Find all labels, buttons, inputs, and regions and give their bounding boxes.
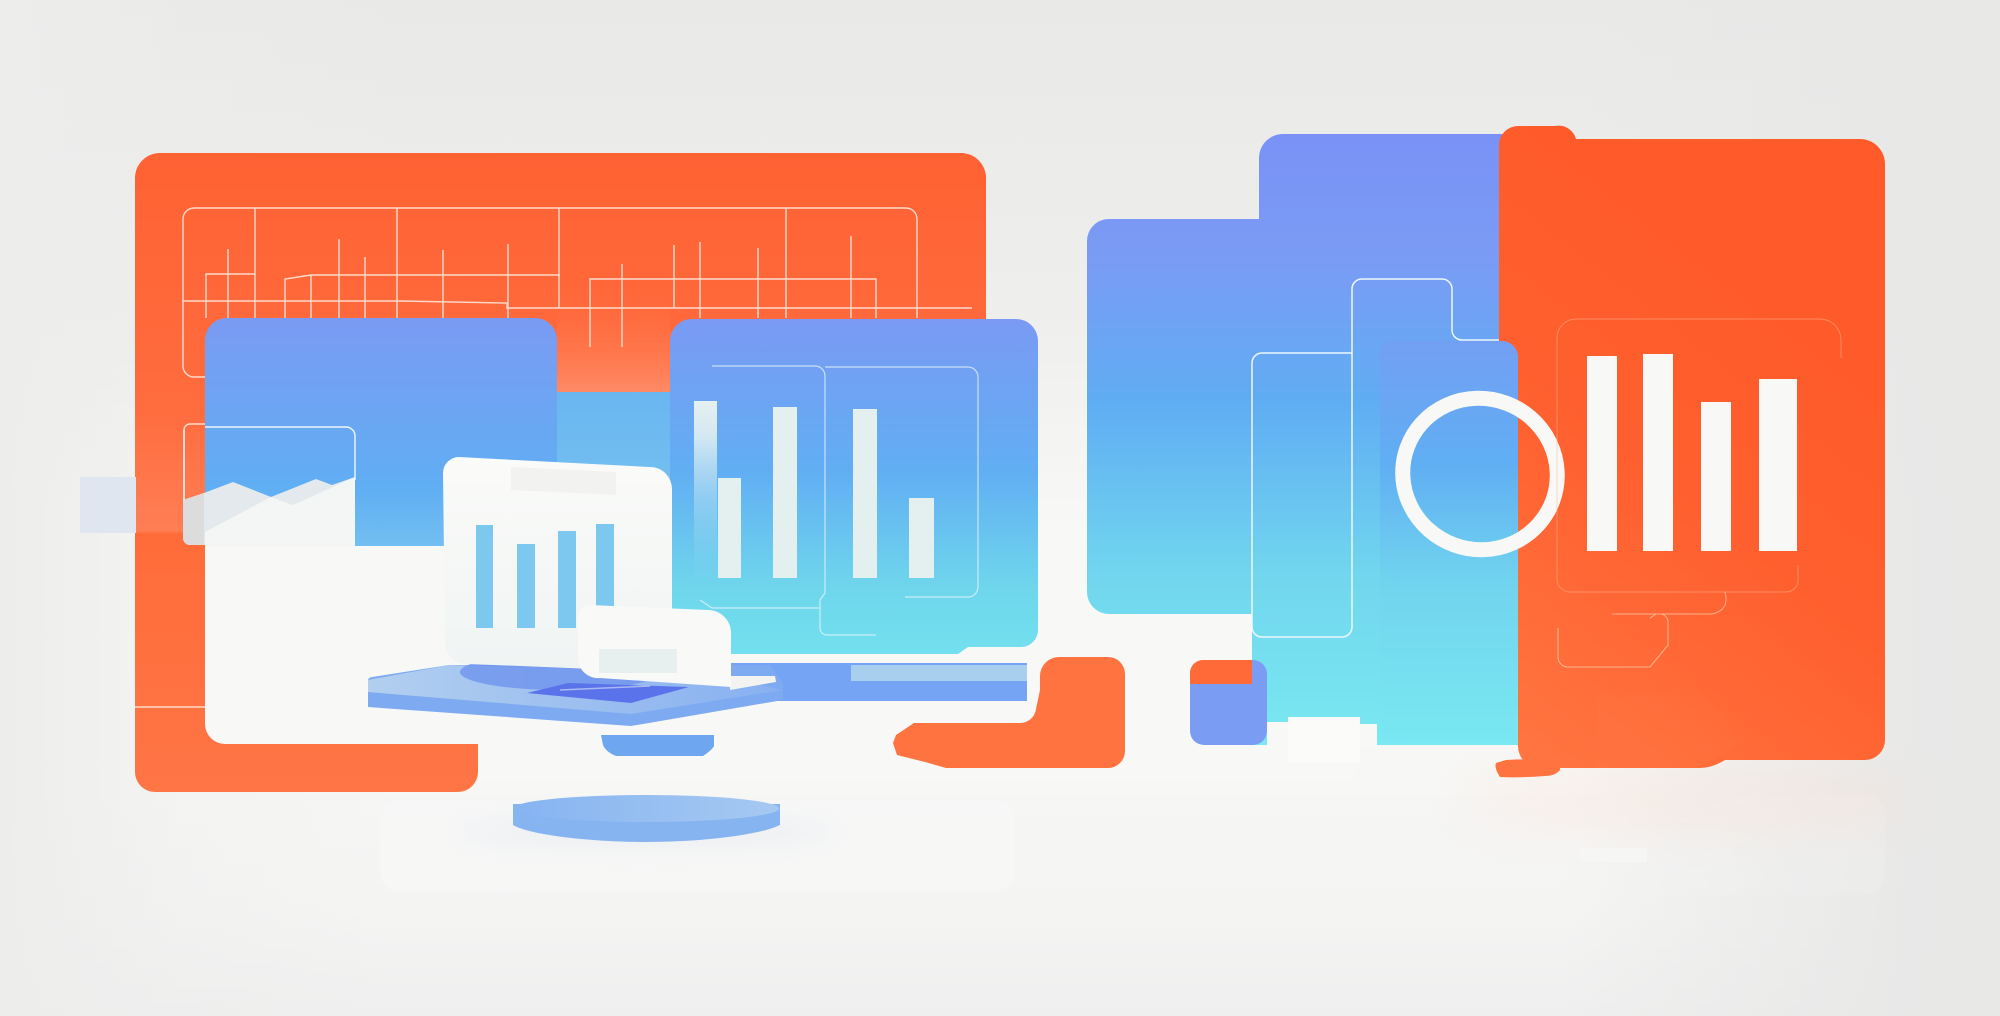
panel: left orange dashboard [135, 153, 986, 792]
floating blue bowl [601, 735, 714, 756]
small white card [578, 605, 731, 687]
right bar chart [1557, 319, 1841, 667]
chart outlines [1557, 319, 1841, 592]
platform under the cards [368, 654, 783, 726]
white tray [730, 676, 776, 690]
panel: blue area chart card [183, 318, 557, 546]
small orange and blue tile [1190, 660, 1267, 745]
chart outline [184, 427, 355, 500]
bars [476, 524, 614, 628]
floating blue disc [456, 795, 836, 846]
chart grid lines [135, 208, 972, 707]
orange rounded block [893, 657, 1125, 768]
panel outlines [1252, 279, 1499, 637]
card label [511, 467, 616, 495]
small orange pill [1496, 759, 1560, 777]
panel: inner blue panel with ring [1252, 279, 1518, 745]
panel: white base sheet [205, 540, 1000, 744]
panel: right orange panel [1499, 126, 1885, 768]
translucent square behind left panel [80, 477, 136, 533]
bars [1587, 354, 1797, 551]
magnifier ring [1381, 377, 1579, 571]
white box [1267, 717, 1377, 763]
small card label [599, 649, 677, 673]
panel: right blue stepped panel [1087, 134, 1505, 745]
white card with bars [443, 457, 672, 672]
panel: blue bar chart card [670, 319, 1038, 654]
card outlines [700, 366, 978, 635]
area chart mountains [183, 477, 355, 546]
keyboard [527, 683, 689, 703]
bars [694, 401, 934, 578]
strip under bar chart card [730, 663, 1027, 701]
